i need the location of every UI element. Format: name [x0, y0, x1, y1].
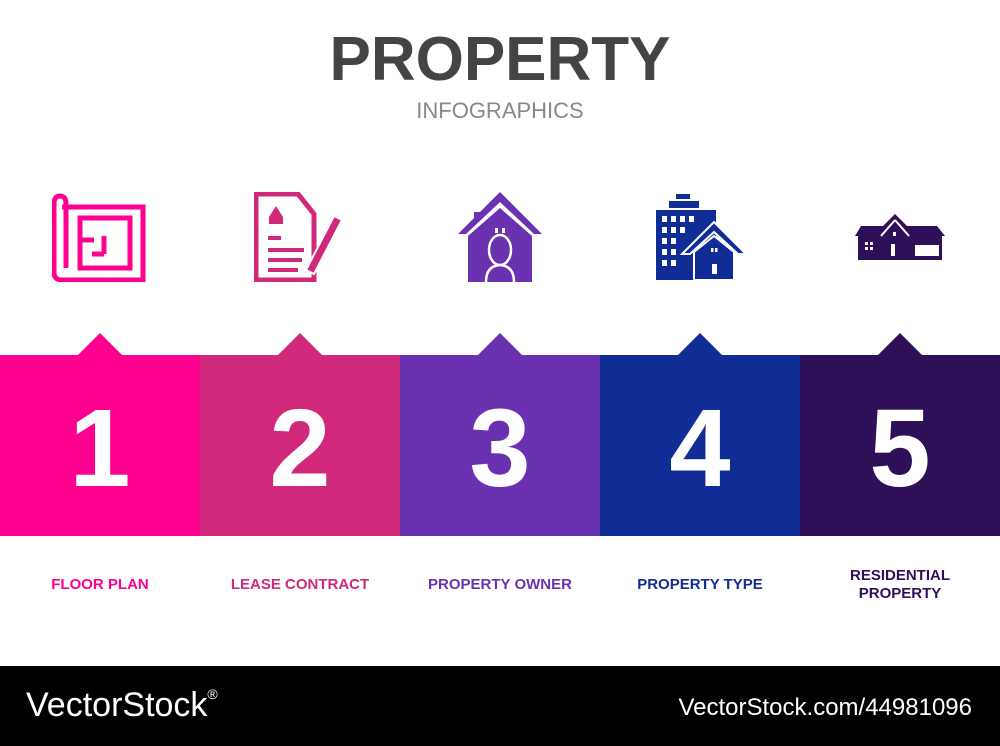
number 2: 2 — [269, 387, 331, 510]
subtitle: INFOGRAPHICS — [416, 98, 584, 123]
footer id: VectorStock.com/44981096 — [678, 694, 972, 721]
panel: step 1 — [0, 355, 200, 536]
number 5: 5 — [869, 387, 931, 510]
icon: residential property — [855, 214, 945, 260]
label 3: PROPERTY OWNER — [428, 576, 572, 593]
title: PROPERTY — [329, 25, 671, 94]
icon: lease contract — [254, 192, 341, 282]
number 3: 3 — [469, 387, 531, 510]
label 4: PROPERTY TYPE — [637, 576, 763, 593]
icon: property type — [656, 194, 744, 280]
panel: step 2 — [200, 355, 400, 536]
footer — [0, 666, 1000, 746]
number 1: 1 — [69, 387, 131, 510]
panel: step 3 — [400, 355, 600, 536]
label 2: LEASE CONTRACT — [231, 576, 369, 593]
icon: floor plan — [52, 194, 146, 282]
icon: property owner — [458, 192, 542, 282]
label 5 — [850, 567, 950, 602]
panel: step 4 — [600, 355, 800, 536]
panel: step 5 — [800, 355, 1000, 536]
label 5: PROPERTY — [859, 585, 941, 602]
label 5: RESIDENTIAL — [850, 567, 950, 584]
number 4: 4 — [669, 387, 731, 510]
label 1: FLOOR PLAN — [51, 576, 149, 593]
footer brand: VectorStock® — [26, 686, 218, 724]
